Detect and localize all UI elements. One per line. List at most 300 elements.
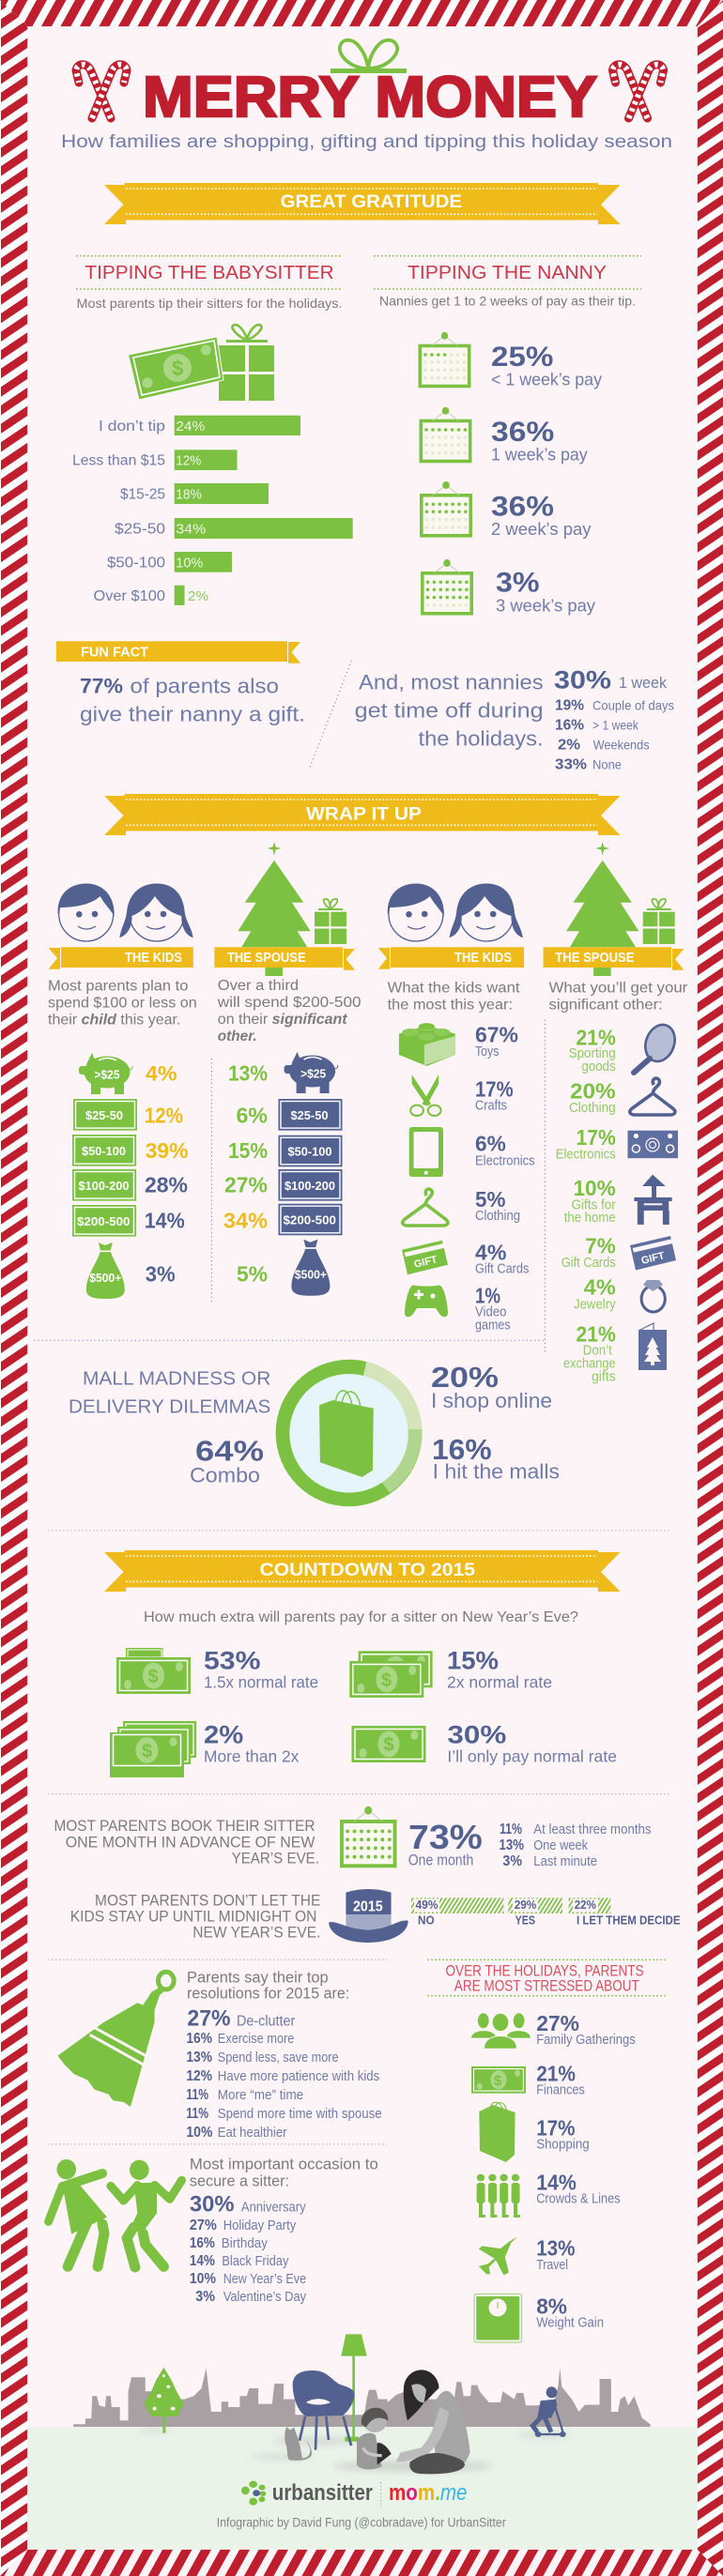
list: resolutions: Spend more time with spouse xyxy=(218,2106,382,2122)
bar chart: babysitter tips: Less than $15 xyxy=(72,452,165,469)
bill $100-200 xyxy=(72,1169,136,1201)
heading: OVER THE HOLIDAYS, PARENTS xyxy=(445,1962,644,1979)
chart: spouse spending: 6% xyxy=(237,1104,268,1128)
stats: time off list xyxy=(554,665,674,773)
logo: urbansitter: urbansitter xyxy=(272,2480,373,2506)
stats: time off list: Weekends xyxy=(593,738,650,753)
stats: booking list: 13% xyxy=(500,1837,524,1853)
stat: 73%: One month xyxy=(408,1852,473,1868)
icon: stereo xyxy=(627,1131,678,1158)
heading: ARE MOST STRESSED ABOUT xyxy=(454,1977,639,1994)
text: kids spend: their child this year. xyxy=(48,1012,180,1028)
text: time off during the holidays: And, most nannies xyxy=(359,670,544,694)
stat: 30%: I’ll only pay normal rate xyxy=(447,1747,617,1766)
list: spouse gifts: exchange xyxy=(563,1356,616,1371)
chart: hatched bars: YES xyxy=(515,1913,535,1928)
stat: 73%: 73% xyxy=(408,1818,483,1856)
list: what kids want: Electronics xyxy=(475,1153,535,1168)
stat: 73% xyxy=(408,1818,483,1868)
banner: great gratitude xyxy=(104,183,620,224)
list: resolutions: Exercise more xyxy=(218,2031,294,2047)
icon: gift bow xyxy=(331,40,407,73)
icon: shopping bag xyxy=(479,2102,515,2162)
icon: cash stack more than 2x: $ xyxy=(142,1742,152,1762)
icon: plane xyxy=(479,2236,517,2275)
money bag xyxy=(86,1242,125,1299)
chart: hatched bars: I LET THEM DECIDE xyxy=(577,1913,681,1928)
panel: holiday stress: 13% xyxy=(536,2235,575,2260)
text: mall madness heading: MALL MADNESS OR xyxy=(83,1368,270,1390)
list: occasions: 16% xyxy=(190,2235,215,2251)
stat: 25%: < 1 week’s pay xyxy=(491,371,602,389)
list: spouse gifts: 17% xyxy=(577,1125,616,1150)
text: spouse spend: Over a third xyxy=(218,978,299,994)
stat: 20% online: 20% xyxy=(431,1362,499,1394)
icon: scale xyxy=(474,2294,522,2342)
stats: time off list: 1 week xyxy=(619,674,667,692)
bar chart: babysitter tips: Over $100 xyxy=(94,588,165,604)
icon: shopping bag xyxy=(319,1391,374,1477)
callout: fun fact: of parents also xyxy=(130,675,279,698)
bill $200-500: $200-500 xyxy=(77,1214,130,1228)
icon: lamp on table xyxy=(634,1175,672,1225)
list: what kids want xyxy=(399,1023,535,1334)
list: what kids want: 67% xyxy=(475,1023,518,1047)
text: get your significant other: What you’ll get your xyxy=(548,980,688,996)
panel: holiday stress: Shopping xyxy=(536,2137,590,2152)
donut chart: shopping xyxy=(276,1360,423,1506)
icon: big calendar xyxy=(342,1806,395,1866)
list: resolutions xyxy=(186,1970,382,2141)
list: what kids want: 1% xyxy=(475,1283,500,1307)
bar chart: babysitter tips: 2% xyxy=(188,588,208,604)
money bag: $500+ xyxy=(89,1272,121,1285)
cat xyxy=(285,2427,312,2461)
tree xyxy=(144,2368,183,2433)
icon: cash stack 1.5x: $ xyxy=(148,1667,159,1687)
bill $25-50 xyxy=(278,1099,342,1131)
text: book sitter: YEAR’S EVE. xyxy=(232,1849,319,1867)
icon: cash stack more than 2x xyxy=(110,1721,196,1777)
stat: 15%: 2x normal rate xyxy=(447,1672,552,1691)
stat: 15% xyxy=(447,1646,552,1691)
icon: tennis racket xyxy=(634,1021,680,1073)
list: spouse gifts: gifts xyxy=(592,1370,616,1385)
banner: wrap it up: WRAP IT UP xyxy=(306,804,422,824)
banner: wrap it up xyxy=(104,794,620,835)
list: occasions: Most important occasion to xyxy=(190,2157,378,2173)
list: spouse gifts: Jewelry xyxy=(574,1298,616,1313)
bar chart: babysitter tips: 10% xyxy=(176,556,203,571)
bill $50-100: $50-100 xyxy=(287,1145,332,1159)
bill $50-100 xyxy=(72,1135,136,1166)
list: spouse gifts: Electronics xyxy=(556,1147,616,1162)
list: what kids want: Gift Cards xyxy=(475,1262,529,1277)
icon: cash: $ xyxy=(494,2073,502,2089)
stats: time off list: Couple of days xyxy=(592,698,674,713)
list: occasions: Anniversary xyxy=(241,2200,306,2216)
shadows xyxy=(138,2429,573,2471)
stat: 15%: 15% xyxy=(447,1646,499,1674)
text: spouse spend: other. xyxy=(218,1029,257,1044)
bar chart: babysitter tips: I don’t tip xyxy=(99,419,165,434)
scooter child xyxy=(532,2386,566,2437)
bill $25-50: $25-50 xyxy=(291,1108,329,1122)
stats: time off list: 30% xyxy=(554,665,611,694)
icon: tree and gift left xyxy=(238,842,346,976)
text: time off during the holidays: get time off during xyxy=(355,698,544,722)
stat: 53%: 53% xyxy=(204,1646,261,1674)
list: resolutions: 12% xyxy=(186,2068,212,2084)
stat: 30%: 30% xyxy=(447,1720,506,1748)
list: occasions: Black Friday xyxy=(222,2253,289,2269)
stat: 2% xyxy=(204,1720,300,1766)
banner: great gratitude: GREAT GRATITUDE xyxy=(281,192,462,212)
mother and child xyxy=(357,2370,470,2474)
chart: kids spending xyxy=(72,1053,188,1299)
credit: Infographic by David Fung (@cobradave) for UrbanSitter xyxy=(217,2516,506,2530)
list: spouse gifts: Clothing xyxy=(569,1101,616,1116)
icon: broom xyxy=(57,1972,174,2107)
icon: phone xyxy=(409,1127,443,1177)
list: what kids want: 6% xyxy=(475,1132,506,1156)
subtitle: How families are shopping, gifting and tipping this holiday season xyxy=(61,132,672,152)
bar chart: babysitter tips: 24% xyxy=(176,419,205,434)
text: get your significant other xyxy=(548,980,688,1013)
illustration: footer scene xyxy=(27,2334,698,2550)
stat: 36% two weeks xyxy=(491,491,592,539)
stats: booking list: Last minute xyxy=(533,1853,597,1869)
bar chart: babysitter tips: $25-50 xyxy=(115,522,165,537)
ribbon: the spouse (gifts) xyxy=(544,947,684,970)
panel: holiday stress: 17% xyxy=(536,2115,575,2140)
ribbon: the kids (wants): THE KIDS xyxy=(454,951,512,966)
chart: hatched bars: 22% xyxy=(575,1898,596,1912)
chart: spouse spending: 13% xyxy=(228,1061,268,1086)
callout: fun fact xyxy=(56,641,305,726)
chart: kids spending: 12% xyxy=(145,1104,183,1128)
money bag: $500+ xyxy=(295,1269,327,1282)
text: time off during the holidays xyxy=(355,670,544,750)
list: resolutions: Parents say their top xyxy=(187,1970,329,1987)
panel: holiday stress: 14% xyxy=(536,2170,577,2194)
text: get your significant other: significant other: xyxy=(548,997,663,1013)
text: time off during the holidays: the holidays. xyxy=(419,726,544,750)
list: what kids want: 4% xyxy=(475,1241,506,1265)
icon: 2015 top hat: 2015 xyxy=(353,1899,383,1915)
icon: gift card xyxy=(630,1236,676,1271)
chart: spouse spending: 34% xyxy=(223,1208,268,1232)
icon: 2015 top hat xyxy=(329,1889,408,1943)
icon: right candy canes xyxy=(612,65,663,118)
panel: holiday stress: Travel xyxy=(536,2258,568,2273)
stat: 25% xyxy=(491,342,602,389)
question: How much extra will parents pay for a sitter on New Year’s Eve? xyxy=(144,1609,578,1625)
text: book sitter: MOST PARENTS BOOK THEIR SITTER xyxy=(54,1817,315,1835)
list: resolutions: 11% xyxy=(186,2087,208,2103)
text: kids want: the most this year: xyxy=(388,997,513,1013)
list: spouse gifts: goods xyxy=(582,1059,616,1075)
icon: diamond ring xyxy=(641,1280,665,1312)
title: MERRY MONEY xyxy=(143,65,597,129)
bill $200-500: $200-500 xyxy=(284,1213,336,1227)
stat: 64% combo xyxy=(190,1436,264,1486)
icon: gift card xyxy=(402,1241,448,1274)
icon: kids faces right xyxy=(388,884,523,941)
intro text: Nannies get 1 to 2 weeks of pay as their tip. xyxy=(379,294,636,309)
stat: 3%: 3 week’s pay xyxy=(496,596,595,615)
stat: 36% two weeks: 2 week’s pay xyxy=(491,520,592,539)
icon: money and gift xyxy=(128,325,274,401)
bill $100-200: $100-200 xyxy=(285,1179,335,1193)
text: spouse spend: will spend $200-500 xyxy=(217,995,362,1011)
list: resolutions: Spend less, save more xyxy=(218,2050,338,2065)
icon: calendar 3% xyxy=(423,559,471,614)
stats: booking list: 3% xyxy=(502,1853,522,1869)
bill $200-500 xyxy=(72,1205,136,1237)
text: midnight: KIDS STAY UP UNTIL MIDNIGHT ON xyxy=(70,1907,316,1925)
heading: TIPPING THE NANNY xyxy=(408,263,607,283)
text: kids want: What the kids want xyxy=(388,980,520,996)
bill $100-200: $100-200 xyxy=(79,1179,130,1193)
stat: 3% xyxy=(496,568,595,615)
piggy bank xyxy=(285,1052,338,1093)
bill $50-100 xyxy=(278,1136,342,1166)
icon: gift card: GIFT xyxy=(640,1250,666,1267)
icon: calendar 36% two weeks xyxy=(422,481,470,536)
stat: 16% malls: I hit the malls xyxy=(433,1460,560,1484)
icon: cash stack 2x: $ xyxy=(381,1670,392,1691)
panel: tipping the nanny xyxy=(374,256,641,615)
ribbon: the kids (wants) xyxy=(378,947,524,969)
list: spouse gifts: Sporting xyxy=(569,1046,616,1061)
chart: kids spending: 3% xyxy=(146,1262,176,1287)
icon: cash stack 1.5x xyxy=(116,1648,191,1694)
stat: 30% xyxy=(447,1720,617,1766)
list: occasions: Birthday xyxy=(222,2235,268,2251)
list: spouse gifts: 10% xyxy=(573,1176,616,1200)
stat: 16% malls xyxy=(432,1434,560,1484)
list: spouse gifts: 21% xyxy=(577,1321,616,1346)
stat: 36% two weeks: 36% xyxy=(491,491,554,522)
panel: holiday stress: Weight Gain xyxy=(536,2316,604,2331)
icon: single bill: $ xyxy=(383,1734,394,1755)
stat: 20% online xyxy=(431,1362,552,1412)
stat: 3%: 3% xyxy=(496,568,540,599)
stat: 53%: 1.5x normal rate xyxy=(204,1672,318,1691)
stats: booking list xyxy=(500,1821,652,1869)
list: what kids want: Crafts xyxy=(475,1099,507,1114)
stat: 53% xyxy=(204,1646,318,1691)
ribbon: the spouse (spend) xyxy=(214,947,355,970)
stats: time off list: None xyxy=(592,757,622,772)
heading: TIPPING THE BABYSITTER xyxy=(85,263,334,283)
list: occasions: 10% xyxy=(190,2271,216,2287)
lamp xyxy=(341,2334,367,2442)
stats: time off list: 16% xyxy=(555,718,584,734)
piggy bank: >$25 xyxy=(94,1068,120,1081)
list: resolutions: Have more patience with kids xyxy=(218,2068,379,2084)
ground xyxy=(27,2427,698,2550)
icon: money and gift: $ xyxy=(172,357,183,380)
list: spouse gifts: 7% xyxy=(585,1233,616,1258)
panel: holiday stress: Crowds & Lines xyxy=(536,2192,621,2207)
list: occasions: 27% xyxy=(190,2218,217,2233)
panel: holiday stress: 27% xyxy=(536,2011,579,2035)
stats: time off list: > 1 week xyxy=(592,718,639,733)
stat: 36% one week xyxy=(491,417,588,465)
chart: hatched bars: 49% xyxy=(415,1898,438,1912)
money bag xyxy=(291,1240,330,1296)
list: spouse gifts: the home xyxy=(564,1211,616,1226)
text: midnight: MOST PARENTS DON’T LET THE xyxy=(95,1891,320,1909)
list: occasions xyxy=(190,2157,378,2305)
stat: 64% combo: Combo xyxy=(190,1463,260,1486)
chart: hatched bars: NO xyxy=(418,1913,435,1928)
icon: hanger xyxy=(403,1189,448,1226)
panel: tipping the babysitter xyxy=(72,256,353,605)
bill $25-50: $25-50 xyxy=(85,1108,123,1122)
stats: time off list: 19% xyxy=(555,698,584,714)
list: occasions: 30% xyxy=(190,2192,235,2218)
chart: kids spending: 39% xyxy=(146,1138,188,1163)
callout: fun fact: 77% xyxy=(80,675,123,698)
bar chart: babysitter tips: $50-100 xyxy=(107,556,165,571)
ribbon: the kids (spend): THE KIDS xyxy=(125,951,182,966)
list: resolutions: resolutions for 2015 are: xyxy=(187,1986,349,2003)
list: what kids want: 17% xyxy=(475,1076,514,1101)
icon: tree greeting card xyxy=(638,1323,667,1370)
bill $200-500 xyxy=(278,1204,342,1235)
text: midnight xyxy=(70,1891,320,1941)
bill $100-200 xyxy=(278,1169,342,1201)
stats: time off list: 2% xyxy=(558,738,580,754)
ribbon: the spouse (gifts): THE SPOUSE xyxy=(555,951,635,966)
banner: countdown to 2015 xyxy=(104,1550,620,1592)
list: resolutions: 11% xyxy=(186,2106,208,2122)
chair xyxy=(293,2370,354,2450)
stats: booking list: 11% xyxy=(500,1821,522,1837)
bar chart: babysitter tips: $15-25 xyxy=(120,486,165,503)
list: resolutions: 10% xyxy=(186,2125,213,2141)
list: resolutions: Eat healthier xyxy=(218,2125,287,2141)
stats: booking list: At least three months xyxy=(533,1821,652,1837)
intro text: Most parents tip their sitters for the holidays. xyxy=(77,296,342,311)
list: occasions: New Year’s Eve xyxy=(223,2271,306,2287)
bill $50-100: $50-100 xyxy=(82,1144,126,1158)
icon: game controller xyxy=(405,1286,448,1317)
chart: spouse spending: 15% xyxy=(228,1138,268,1163)
icon: scissors xyxy=(410,1075,441,1116)
piggy bank xyxy=(79,1053,132,1094)
chart: spouse spending: 27% xyxy=(224,1173,268,1197)
text: book sitter xyxy=(54,1817,319,1867)
text: mall madness heading xyxy=(69,1368,270,1418)
list: what kids want: Toys xyxy=(475,1044,499,1059)
chart: spouse spending xyxy=(223,1052,342,1296)
list: spouse gifts: 20% xyxy=(570,1078,616,1103)
panel: holiday stress: Family Gatherings xyxy=(536,2033,636,2048)
stat: 25%: 25% xyxy=(491,342,553,373)
chart: hatched bars: 29% xyxy=(515,1898,537,1912)
list: resolutions: 27% xyxy=(187,2005,231,2031)
logo: mom.me: mom.me xyxy=(389,2480,468,2506)
list: spouse gifts: Gift Cards xyxy=(561,1256,616,1271)
icon: tree and gift right xyxy=(566,842,675,976)
icon: gift card: GIFT xyxy=(413,1254,438,1271)
stats: booking list: One week xyxy=(533,1837,588,1853)
title xyxy=(143,40,597,129)
chart: hatched bars xyxy=(411,1898,681,1928)
list: what kids want: Video xyxy=(475,1305,507,1320)
banner: countdown to 2015: COUNTDOWN TO 2015 xyxy=(259,1561,475,1580)
bill $25-50 xyxy=(73,1099,137,1131)
text: mall madness heading: DELIVERY DILEMMAS xyxy=(69,1396,270,1418)
list: spouse gifts: Don’t xyxy=(583,1343,612,1358)
list: resolutions: 16% xyxy=(186,2031,212,2047)
stat: 36% one week: 1 week’s pay xyxy=(491,446,588,465)
city skyline xyxy=(73,2368,651,2427)
icon: left candy canes xyxy=(76,65,127,118)
chart: kids spending: 28% xyxy=(145,1173,188,1197)
icon: single bill xyxy=(351,1726,426,1762)
icon: kids faces left xyxy=(58,884,193,941)
stat: 64% combo: 64% xyxy=(195,1436,264,1468)
list: spouse gifts: 4% xyxy=(584,1274,616,1299)
icon: calendar 36% one week xyxy=(421,407,470,462)
list: occasions: Valentine’s Day xyxy=(223,2289,307,2305)
list: occasions: Holiday Party xyxy=(223,2218,297,2233)
logo: urbansitter xyxy=(241,2480,373,2506)
icon: calendar 25% xyxy=(420,332,469,387)
text: midnight: NEW YEAR’S EVE. xyxy=(192,1923,320,1941)
bar chart: babysitter tips: 18% xyxy=(176,486,202,503)
list: resolutions: De-clutter xyxy=(237,2013,295,2029)
callout: fun fact: give their nanny a gift. xyxy=(80,703,305,726)
stat: 16% malls: 16% xyxy=(432,1434,492,1466)
chart: kids spending: 4% xyxy=(146,1062,177,1086)
text: kids spend: spend $100 or less on xyxy=(48,995,197,1011)
text: spouse spend: on their significant xyxy=(218,1012,347,1028)
icon: crowd xyxy=(477,2174,520,2218)
stat: 2%: 2% xyxy=(204,1720,243,1748)
list: what kids want: 5% xyxy=(475,1187,505,1212)
stat: 20% online: I shop online xyxy=(431,1389,552,1412)
list: spouse gifts: Gifts for xyxy=(571,1197,616,1212)
ribbon: the kids (spend) xyxy=(49,947,193,969)
stat: 36% one week: 36% xyxy=(491,417,554,448)
icon: hanger xyxy=(630,1078,675,1115)
text: kids spend xyxy=(48,978,197,1028)
text: spouse spend xyxy=(217,978,362,1044)
list: occasions: 14% xyxy=(190,2253,215,2269)
piggy bank: >$25 xyxy=(300,1066,326,1081)
callout: fun fact: FUN FACT xyxy=(81,645,148,660)
panel: holiday stress: 8% xyxy=(536,2294,567,2318)
list: what kids want: games xyxy=(475,1318,511,1334)
heading xyxy=(445,1962,644,1994)
list: what kids want: Clothing xyxy=(475,1209,520,1224)
icon: dancing couple xyxy=(49,2159,182,2267)
icon: family xyxy=(471,2013,531,2049)
text: book sitter: ONE MONTH IN ADVANCE OF NEW xyxy=(66,1833,315,1851)
text: kids spend: Most parents plan to xyxy=(48,978,189,994)
panel: holiday stress xyxy=(427,1959,666,2342)
icon: cash stack 2x xyxy=(349,1651,433,1698)
list: spouse gifts: 21% xyxy=(577,1025,616,1049)
stat: 2%: More than 2x xyxy=(204,1747,300,1766)
bar chart: babysitter tips xyxy=(72,416,353,605)
